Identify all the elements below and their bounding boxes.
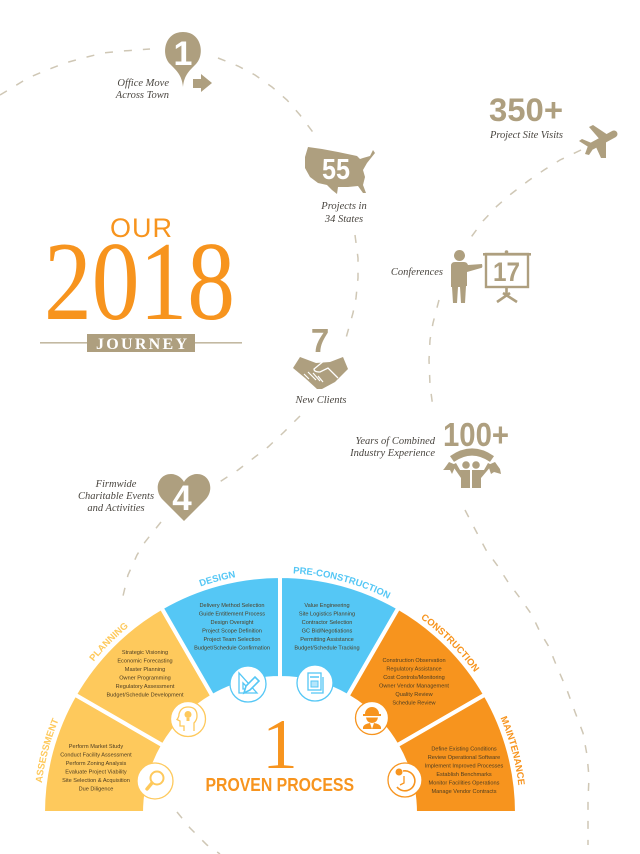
milestone: conferences: Conferences (391, 267, 443, 278)
panel: construction: Construction Observation (382, 658, 446, 664)
panel: pre-construction: Permitting Assistance (300, 637, 354, 643)
milestone: projects in states (305, 147, 375, 225)
panel: planning: PLANNING (89, 623, 128, 662)
milestone: new clients: New Clients (294, 395, 347, 406)
panel: maintenance: Review Operational Software (428, 755, 500, 761)
panel: design: Guide Entitlement Process (199, 612, 265, 618)
milestone: projects in states: 55 (322, 154, 350, 186)
milestone: charitable events (78, 474, 210, 521)
icon: clock cycle (388, 763, 422, 797)
milestone: industry experience: Industry Experience (349, 448, 435, 459)
milestone: site visits: Project Site Visits (489, 130, 563, 141)
panel: planning: Strategic Visioning (122, 650, 168, 656)
milestone: charitable events: and Activities (87, 503, 145, 514)
panel: assessment: Due Diligence (79, 786, 113, 792)
panel: construction: Owner Vendor Management (379, 684, 449, 690)
milestone: office move: 1 (174, 35, 192, 73)
panel: assessment: Evaluate Project Viability (65, 770, 127, 776)
milestone: projects in states: 34 States (324, 214, 363, 225)
title: JOURNEY (96, 336, 187, 353)
panel: assessment: ASSESSMENT (36, 718, 58, 783)
panel: pre-construction: Budget/Schedule Tracking (294, 646, 360, 652)
milestone: site visits: 350+ (489, 92, 563, 128)
panel: pre-construction: GC Bid/Negotiations (302, 628, 353, 634)
milestone: new clients: 7 (311, 322, 329, 359)
panel: planning: Economic Forecasting (117, 658, 173, 664)
milestone: conferences (391, 250, 531, 303)
milestone: charitable events: Charitable Events (78, 491, 154, 502)
panel: maintenance: Manage Vendor Contracts (432, 789, 497, 795)
panel: construction: Quality Review (395, 692, 434, 698)
icon: plane (579, 125, 614, 158)
panel: planning (76, 610, 210, 746)
panel: construction (346, 608, 482, 743)
milestone: industry experience: 100+ (443, 416, 509, 453)
title: OUR (110, 213, 172, 243)
panel: design: Delivery Method Selection (200, 603, 264, 609)
milestone: projects in states: Projects in (320, 201, 367, 212)
milestone: site visits (489, 92, 614, 158)
icon: documents (297, 665, 333, 701)
title: 2018 (44, 220, 235, 344)
panel: construction: Regulatory Assistance (386, 666, 442, 672)
panel: assessment (36, 698, 174, 811)
panel: maintenance: Establish Benchmarks (436, 772, 492, 778)
milestone: office move (115, 32, 212, 101)
panel: assessment: Perform Market Study (69, 744, 123, 750)
icon: presentation board (483, 250, 531, 302)
icon: presenter (451, 250, 482, 303)
panel: construction: Cost Controls/Monitoring (383, 675, 445, 681)
icon: people with banner (443, 452, 501, 488)
panel: planning: Budget/Schedule Development (106, 692, 184, 698)
panel: maintenance: Monitor Facilities Operations (429, 780, 500, 786)
milestone: charitable events: Firmwide (95, 479, 137, 490)
panel: design: Project Team Selection (203, 637, 261, 643)
milestone: office move: Office Move (117, 78, 169, 89)
milestone: industry experience: Years of Combined (355, 436, 436, 447)
icon: magnifier (137, 763, 173, 799)
panel: assessment: Perform Zoning Analysis (66, 761, 127, 767)
panel: design: Budget/Schedule Confirmation (194, 646, 270, 652)
panel: maintenance: Define Existing Conditions (431, 746, 497, 752)
icon: head with bulb (170, 702, 206, 736)
panel: maintenance (387, 694, 525, 811)
panel: pre-construction: Value Engineering (304, 603, 350, 609)
panel: pre-construction (282, 566, 396, 702)
panel: maintenance: Implement Improved Processes (425, 764, 504, 770)
panel: pre-construction: PRE-CONSTRUCTION (294, 566, 391, 599)
panel: maintenance: MAINTENANCE (500, 716, 525, 786)
panel: assessment: Site Selection & Acquisition (62, 778, 130, 784)
milestone: industry experience (349, 416, 509, 488)
icon: ruler and pencil (230, 666, 266, 702)
milestone: charitable events: 4 (172, 479, 192, 518)
icon: presentation board: 17 (493, 257, 520, 287)
center heading: 1 proven process: 1 (262, 706, 298, 784)
panel: assessment: Conduct Facility Assessment (60, 752, 132, 758)
panel: planning: Master Planning (125, 667, 165, 673)
panel: construction: Schedule Review (392, 700, 437, 706)
icon: construction worker (356, 702, 388, 734)
milestone: new clients (293, 322, 348, 406)
panel: planning: Regulatory Assessment (116, 684, 175, 690)
panel: design: Design Oversight (211, 620, 254, 626)
icon: handshake (293, 357, 348, 389)
center heading: 1 proven process (206, 706, 354, 795)
milestone: office move: Across Town (115, 90, 169, 101)
center heading: 1 proven process: PROVEN PROCESS (206, 774, 354, 795)
panel: design (160, 570, 278, 703)
panel: pre-construction: Contractor Selection (302, 620, 352, 626)
panel: design: DESIGN (199, 570, 236, 586)
panel: planning: Owner Programming (119, 676, 171, 682)
panel: design: Project Scope Definition (202, 628, 262, 634)
panel: pre-construction: Site Logistics Planning (299, 612, 355, 618)
panel: construction: CONSTRUCTION (422, 614, 480, 672)
